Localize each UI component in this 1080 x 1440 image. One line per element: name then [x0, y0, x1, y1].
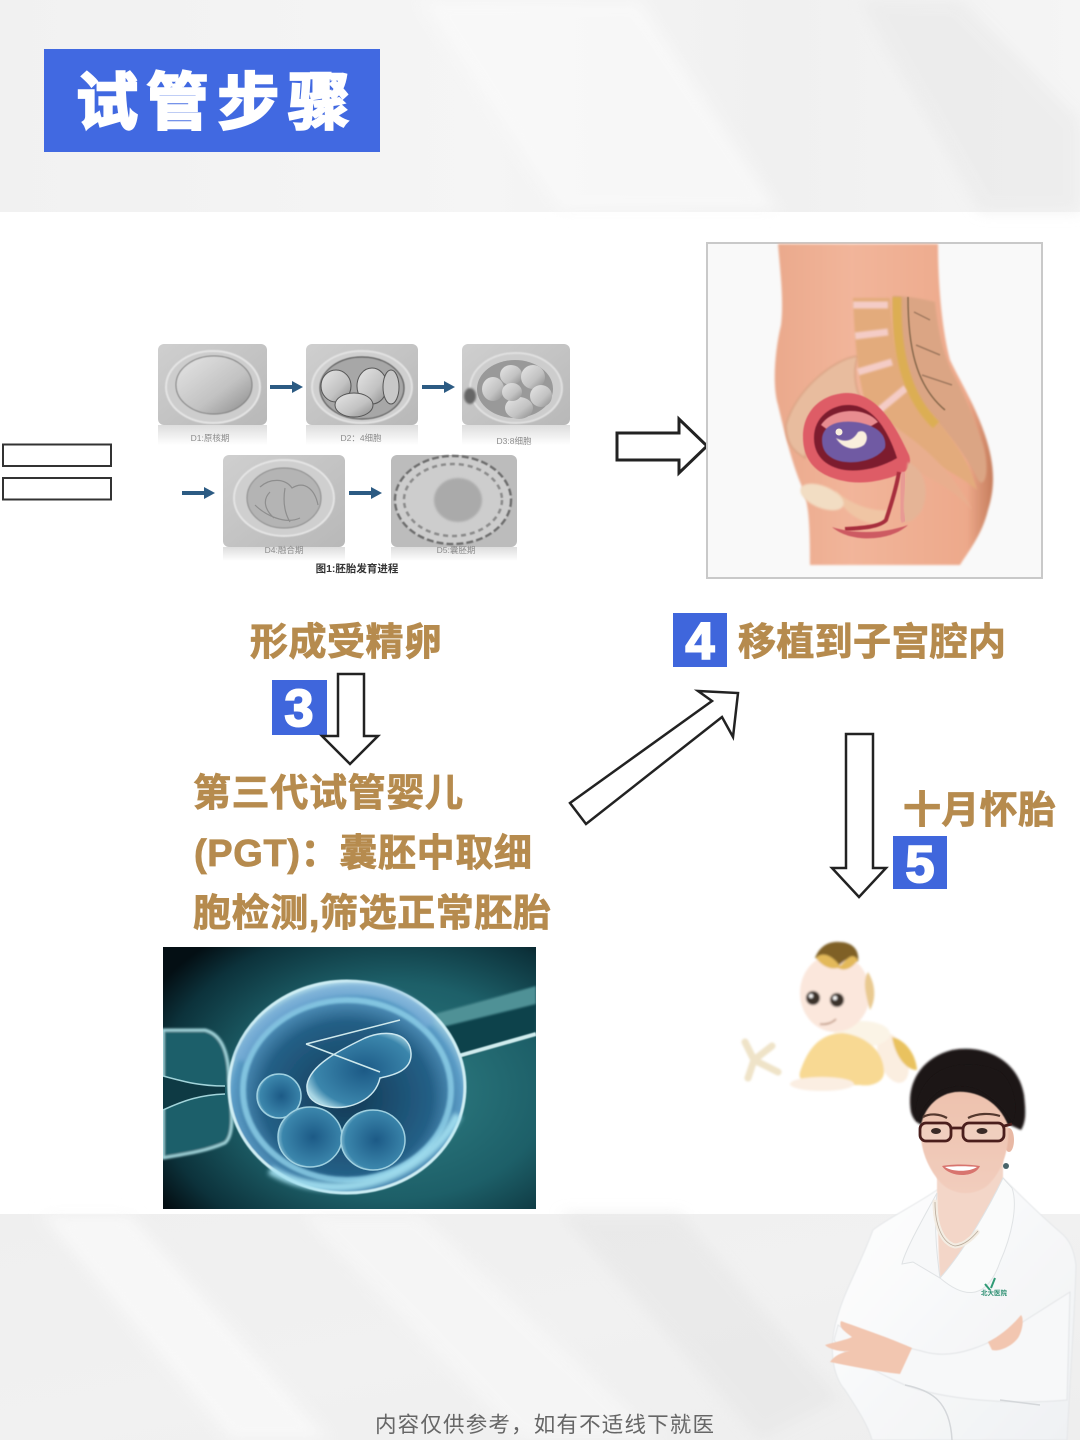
embryo tile: D2: D2：4细胞: [340, 433, 382, 443]
embryo tile: D3: [462, 344, 570, 446]
spine: [853, 298, 977, 490]
ear and earring: [1004, 1128, 1014, 1152]
badge: step 5: [893, 836, 947, 894]
coat badge: [981, 1278, 1008, 1297]
badge: step 4: 4: [686, 613, 715, 671]
holding pipette: [163, 1030, 232, 1158]
bottom footer band: [0, 1214, 1080, 1440]
blastomeres: [307, 1033, 411, 1108]
crossed arms: [834, 1292, 1070, 1402]
hand, left: [825, 1321, 912, 1374]
embryo tile: D2: [306, 344, 418, 445]
arrow: down to baby: [832, 734, 886, 897]
lower back tissue: [882, 420, 972, 510]
text block: third-generation IVF PGT: [193, 773, 551, 935]
step 1-2 placeholder boxes: [3, 444, 111, 500]
smile: [942, 1164, 980, 1175]
neck and chest skin: [937, 1150, 1003, 1278]
uterus: [803, 393, 910, 483]
biopsy needle: [446, 1005, 536, 1058]
top header band: [0, 0, 1080, 212]
face: [921, 1092, 1008, 1193]
pelvic bone: [786, 356, 868, 458]
pale tissue around vagina: [900, 462, 926, 522]
heading: fertilised egg: 形成受精卵: [250, 622, 442, 664]
embryo tile: D1: D1:原核期: [191, 433, 229, 443]
back muscle: [893, 296, 986, 483]
glasses: [920, 1123, 1012, 1141]
arrow: down to PGT: [322, 674, 378, 764]
embryo tile: D4: [223, 455, 345, 561]
vagina canal: [845, 472, 899, 529]
badge: step 5: 5: [906, 836, 934, 894]
small arrows between embryo tiles: [182, 381, 455, 499]
arrow: embryo to uterus: [617, 419, 707, 473]
embryo development chart: [158, 344, 570, 575]
white coat: [832, 1178, 1076, 1440]
needle tip: [306, 1020, 400, 1072]
arrow: diagonal to transfer: [570, 691, 738, 824]
heading: transfer into uterine cavity: 移植到子宫腔内: [738, 622, 1006, 664]
zona sphere: [229, 981, 465, 1193]
eyes and brows: [923, 1114, 1000, 1134]
doctor portrait: [825, 1049, 1076, 1440]
body silhouette: [775, 244, 993, 565]
disclaimer footer: 内容仅供参考，如有不适线下就医: [375, 1413, 714, 1437]
badge: step 4: [673, 613, 727, 671]
text block: third-generation IVF PGT: 第三代试管婴儿: [193, 773, 463, 815]
title: [44, 49, 380, 152]
hair fringe: [916, 1065, 1015, 1122]
hand, right: [988, 1315, 1023, 1350]
embryo chart caption: 图1:胚胎发育进程: [316, 562, 399, 575]
photo: embryo biopsy: [163, 947, 536, 1209]
embryo tile: D4: D4:融合期: [265, 545, 303, 555]
embryo tile: D3: D3:8细胞: [497, 436, 532, 446]
embryo tile: D5: [391, 455, 517, 561]
embryo tile: D5: D5:囊胚期: [437, 545, 475, 555]
illustration: uterus cross-section: [707, 243, 1042, 578]
lapels: [902, 1193, 940, 1278]
badge: step 3: 3: [285, 680, 313, 738]
title: 试管步骤: [76, 69, 350, 138]
hair back: [910, 1049, 1025, 1130]
text block: third-generation IVF PGT: (PGT)：囊胚中取细: [194, 833, 532, 875]
text block: third-generation IVF PGT: 胞检测,筛选正常胚胎: [193, 893, 551, 935]
pubic bone: [797, 478, 847, 516]
embryo tile: D1: [158, 344, 267, 445]
heading: ten months of pregnancy: 十月怀胎: [903, 790, 1056, 832]
badge: step 3: [272, 680, 327, 738]
fetus sac: [822, 422, 885, 462]
pearl necklace: [935, 1202, 978, 1246]
illustration: crawling baby: [745, 942, 917, 1091]
coat badge: 北大医院: [981, 1288, 1008, 1297]
